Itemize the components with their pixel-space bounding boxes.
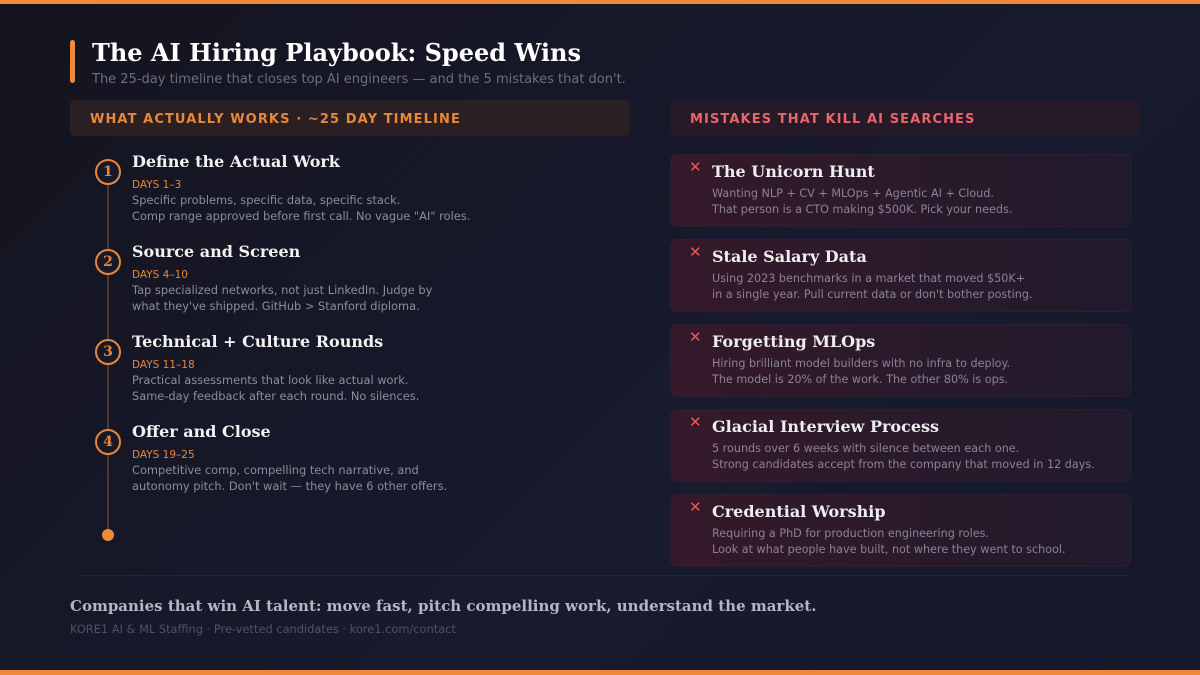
- card: mlops: The model is 20% of the work. The other 80% is ops.: [712, 373, 1008, 386]
- step 1: 1: [103, 164, 113, 180]
- card: credential: ✕: [689, 498, 702, 516]
- step 2: Source and Screen: [132, 242, 300, 261]
- end dot: [102, 529, 114, 541]
- card: unicorn hunt: ✕: [689, 158, 702, 176]
- step 1: [95, 152, 470, 223]
- left panel header: WHAT ACTUALLY WORKS · ~25 DAY TIMELINE: [90, 112, 461, 127]
- step 3: 3: [103, 344, 113, 360]
- card: glacial: Glacial Interview Process: [712, 417, 939, 436]
- card: unicorn hunt: Wanting NLP + CV + MLOps + Agentic AI + Cloud.: [712, 187, 994, 200]
- step 4: autonomy pitch. Don't wait — they have 6 other offers.: [132, 479, 447, 493]
- timeline: [95, 152, 470, 541]
- step 2: 2: [103, 254, 113, 270]
- timeline line: [107, 160, 109, 535]
- card: credential: Look at what people have built, not where they went to school.: [712, 543, 1066, 556]
- card: stale salary: [670, 239, 1131, 312]
- card: stale salary: ✕: [689, 243, 702, 261]
- step 4: Competitive comp, compelling tech narrative, and: [132, 463, 419, 477]
- card: mlops: ✕: [689, 328, 702, 346]
- step 3: DAYS 11–18: [132, 359, 195, 371]
- step 4: 4: [103, 434, 113, 450]
- step 3: Technical + Culture Rounds: [132, 332, 383, 351]
- step 3: Same-day feedback after each round. No silences.: [132, 389, 419, 403]
- card: stale salary: Stale Salary Data: [712, 247, 867, 266]
- left panel header: [70, 100, 630, 136]
- card: credential: [670, 494, 1131, 567]
- card: credential: Credential Worship: [712, 502, 886, 521]
- card: mlops: Hiring brilliant model builders with no infra to deploy.: [712, 357, 1010, 370]
- step 2: Tap specialized networks, not just LinkedIn. Judge by: [132, 283, 432, 297]
- step 2: DAYS 4–10: [132, 269, 188, 281]
- footer credit: KORE1 AI & ML Staffing · Pre-vetted candidates · kore1.com/contact: [70, 622, 456, 636]
- card: credential: Requiring a PhD for production engineering roles.: [712, 527, 989, 540]
- step 1: Specific problems, specific data, specific stack.: [132, 193, 400, 207]
- title: The AI Hiring Playbook: Speed Wins: [92, 38, 581, 67]
- step 2: [95, 242, 432, 313]
- step 3: [95, 332, 419, 403]
- right panel header: MISTAKES THAT KILL AI SEARCHES: [690, 112, 976, 127]
- right panel header: [670, 100, 1140, 136]
- step 3: Practical assessments that look like actual work.: [132, 373, 408, 387]
- card: glacial: ✕: [689, 413, 702, 431]
- card: glacial: [670, 409, 1131, 482]
- card: glacial: 5 rounds over 6 weeks with silence between each one.: [712, 442, 1019, 455]
- card: mlops: Forgetting MLOps: [712, 332, 875, 351]
- card: unicorn hunt: The Unicorn Hunt: [712, 162, 875, 181]
- card: stale salary: Using 2023 benchmarks in a market that moved $50K+: [712, 272, 1025, 285]
- step 4: Offer and Close: [132, 422, 271, 441]
- step 4: DAYS 19–25: [132, 449, 195, 461]
- bottom accent bar: [0, 670, 1200, 675]
- card: unicorn hunt: That person is a CTO making $500K. Pick your needs.: [712, 203, 1012, 216]
- card: glacial: Strong candidates accept from the company that moved in 12 days.: [712, 458, 1095, 471]
- step 2: what they've shipped. GitHub > Stanford diploma.: [132, 299, 420, 313]
- step 1: Comp range approved before first call. No vague "AI" roles.: [132, 209, 470, 223]
- card: stale salary: in a single year. Pull current data or don't bother posting.: [712, 288, 1033, 301]
- step 1: Define the Actual Work: [132, 152, 340, 171]
- footer takeaway: Companies that win AI talent: move fast, pitch compelling work, understand the market.: [70, 597, 816, 615]
- top accent bar: [0, 0, 1200, 4]
- card: mlops: [670, 324, 1131, 397]
- step 4: [95, 422, 447, 493]
- subtitle: The 25-day timeline that closes top AI engineers — and the 5 mistakes that don't.: [92, 72, 626, 87]
- title accent bar: [70, 40, 75, 83]
- step 1: DAYS 1–3: [132, 179, 181, 191]
- card: unicorn hunt: [670, 154, 1131, 227]
